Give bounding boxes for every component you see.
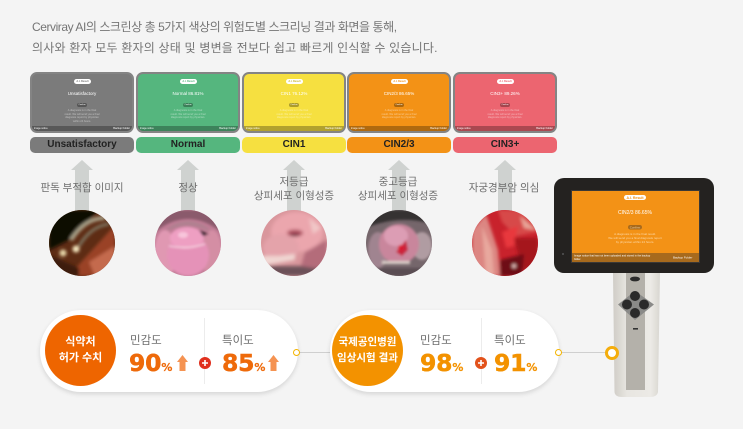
caption: moderate grade: 상피세포 이형성증 (358, 190, 438, 202)
intro text: Cerviray AI의 스크린상 총 5가지 색상의 위험도별 스크리닝 결과 화면을 통해, (32, 20, 397, 34)
panel: result screen unsatisfactory: Image notice (34, 127, 48, 130)
panel: result screen unsatisfactory: Unsatisfactory (68, 91, 96, 96)
panel: result screen normal: A.I. Result (182, 80, 195, 83)
panel: result screen CIN1: A diagnosis is in the final result. We will send you a final diagnosis report by physician. (277, 109, 311, 119)
panel: result screen CIN3+: A diagnosis is in the final result. We will send you a final diagnosis report by physician. (488, 109, 522, 119)
screen: by physician within 24 hours. (616, 240, 654, 244)
tag: CIN1 (242, 137, 346, 153)
connector ring 1 (293, 349, 300, 356)
tag: CIN1: CIN1 (283, 139, 305, 150)
divider 1 (204, 318, 205, 384)
tag: Unsatisfactory (30, 137, 134, 153)
number: 85%: 85% (222, 349, 265, 377)
screen: A.I. Result (626, 196, 644, 200)
icon: plus 1 (199, 357, 211, 369)
label: specificity 2: 특이도 (494, 335, 526, 347)
tag: CIN2/3: CIN2/3 (383, 139, 415, 150)
badge: clinical trial: 임상시험 결과 (337, 352, 398, 364)
arrow 3 (283, 160, 305, 211)
panel: result screen CIN1: Image notice (246, 127, 260, 130)
tag: Normal (136, 137, 240, 153)
panel: result screen CIN1: CIN1 76.12% (281, 91, 307, 96)
panel: result screen CIN1: A.I. Result (288, 80, 301, 83)
tag: CIN2/3 (347, 137, 451, 153)
panel: result screen CIN2/3: Image notice (351, 127, 365, 130)
icon: plus 2 (475, 357, 487, 369)
caption: low grade (254, 176, 334, 202)
panel: result screen normal: Normal 86.81% (172, 91, 204, 96)
label: sensitivity 2: 민감도 (420, 335, 452, 347)
tag: CIN3+ (453, 137, 557, 153)
label: sensitivity 1: 민감도 (130, 335, 162, 347)
panel: MFDS approved figures (40, 310, 298, 392)
intro text (32, 20, 438, 55)
panel: result screen unsatisfactory: Confirm (78, 104, 86, 106)
photo: unsatisfactory image (49, 210, 115, 276)
panel: result screen CIN3+: Confirm (501, 104, 508, 106)
panel: result screen unsatisfactory: A diagnosis is in the final result. We will send you a final diagnosis report by physician within 24 hours. (65, 109, 99, 123)
icon: up arrow 1 (177, 355, 188, 371)
panel: result screen CIN1: Confirm (290, 104, 298, 106)
photo: normal cervix (155, 210, 221, 276)
device: handheld colposcope (554, 178, 714, 397)
handle (613, 272, 660, 397)
panel: result screen CIN3+: CIN3+ 89.26% (490, 91, 520, 96)
panel: result screen CIN2/3: Confirm (395, 104, 402, 106)
panel: result screen CIN3+ (453, 72, 557, 133)
caption: moderate grade (358, 176, 438, 202)
panel: result screen unsatisfactory: Backup Folder (113, 127, 130, 130)
connector lines (298, 352, 612, 353)
bezel (554, 178, 714, 273)
badge: MFDS: 허가 수치 (59, 352, 102, 364)
screen: CIN2/3 86.65% (618, 210, 653, 216)
photo: moderate grade lesion (366, 210, 432, 276)
arrow 5 (494, 160, 516, 211)
number: 90%: 90% (129, 349, 172, 377)
panel: result screen CIN2/3: CIN2/3 86.65% (384, 91, 414, 96)
panel: result screen CIN2/3: A.I. Result (393, 80, 406, 83)
label: specificity 1: 특이도 (222, 335, 254, 347)
arrow 4 (388, 160, 410, 211)
photo: suspected cancer (472, 210, 538, 276)
screen (572, 191, 699, 262)
number: 98%: 98% (420, 349, 463, 377)
caption: moderate grade: 중고등급 (379, 176, 417, 188)
badge: MFDS: 식약처 (65, 336, 96, 348)
number: 91%: 91% (494, 349, 537, 377)
connector ring 3 (605, 346, 619, 360)
panel: result screen CIN1: Backup Folder (325, 127, 342, 130)
badge: clinical trial: 국제공인병원 (338, 336, 396, 348)
panel: result screen unsatisfactory: A.I. Result (76, 80, 89, 83)
panel: result screen CIN3+: A.I. Result (499, 80, 512, 83)
panel: result screen CIN3+: Image notice (457, 127, 471, 130)
badge: MFDS (45, 315, 116, 386)
panel: result screen normal: A diagnosis is in the final result. We will send you a final diagnosis report by physician. (171, 109, 205, 119)
panel: result screen normal: Confirm (184, 104, 192, 106)
panel: result screen CIN2/3: Backup Folder (430, 127, 447, 130)
divider 2 (481, 318, 482, 384)
panel: result screen CIN1 (242, 72, 346, 133)
caption: low grade: 상피세포 이형성증 (254, 190, 334, 202)
tag: CIN3+: CIN3+ (491, 139, 519, 150)
screen: Backup Folder (673, 256, 692, 260)
caption: normal: 정상 (178, 182, 198, 194)
panel: result screen unsatisfactory (30, 72, 134, 133)
arrow 2 (177, 160, 199, 211)
screen: We will send you a final diagnosis report (608, 236, 662, 240)
tag: Normal: Normal (171, 139, 205, 150)
badge: clinical trial (332, 315, 403, 386)
caption: suspected cervical cancer: 자궁경부암 의심 (469, 182, 539, 194)
screen: folder. (574, 257, 581, 261)
icon: up arrow 2 (268, 355, 279, 371)
caption: low grade: 저등급 (280, 176, 308, 188)
panel: result screen normal (136, 72, 240, 133)
intro text: 의사와 환자 모두 환자의 상태 및 병변을 전보다 쉽고 빠르게 인식할 수 있습니다. (32, 41, 438, 55)
connector ring 2 (555, 349, 562, 356)
screen: Confirm (630, 226, 641, 230)
caption: unsatisfactory image: 판독 부적합 이미지 (40, 182, 124, 194)
panel: result screen CIN3+: Backup Folder (536, 127, 553, 130)
panel: hospital clinical trial figures (330, 310, 559, 392)
screen: A diagnosis is in the final result. (614, 232, 656, 236)
tag: Unsatisfactory: Unsatisfactory (47, 139, 117, 150)
panel: result screen normal: Image notice (140, 127, 154, 130)
panel: result screen normal: Backup Folder (219, 127, 236, 130)
arrow 1 (71, 160, 93, 211)
panel: result screen CIN2/3 (347, 72, 451, 133)
photo: low grade lesion (261, 210, 327, 276)
screen: Image notice that has not been uploaded and stored in the backup (574, 254, 651, 258)
panel: result screen CIN2/3: A diagnosis is in the final result. We will send you a final diagnosis report by physician. (382, 109, 416, 119)
